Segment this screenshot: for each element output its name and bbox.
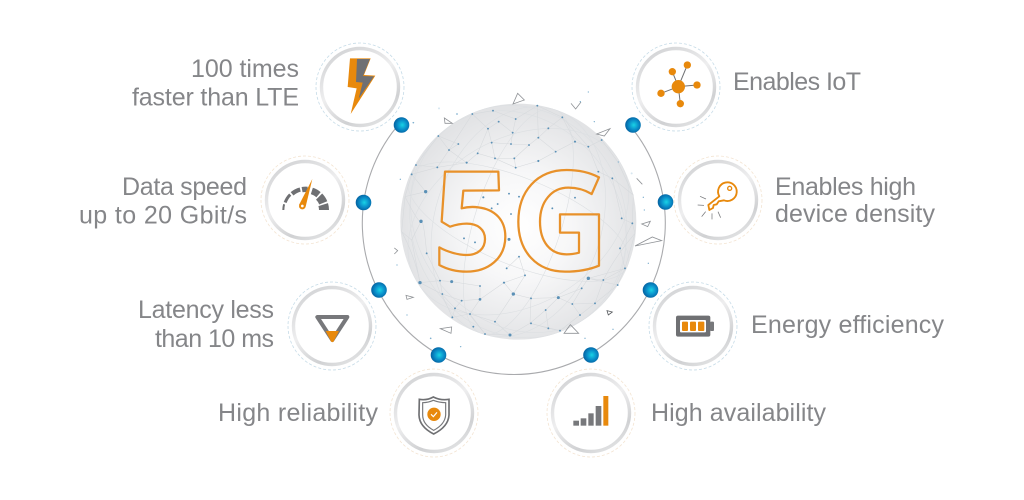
panel: high reliability — [218, 369, 478, 457]
panel: high availability — [547, 369, 826, 457]
panel: latency — [138, 282, 376, 370]
label: Latency less — [138, 296, 274, 324]
label: up to 20 Gbit/s — [79, 202, 247, 230]
label: Energy efficiency — [751, 311, 944, 339]
connector dots — [356, 117, 673, 363]
icon: lightning bolt — [348, 58, 375, 114]
heading: 5G — [439, 170, 599, 272]
globe — [400, 104, 636, 340]
icon: signal bars — [573, 396, 608, 426]
label: Enables IoT — [733, 68, 861, 96]
panel: energy efficiency — [649, 282, 944, 370]
network mesh — [402, 106, 635, 335]
globe meridians — [408, 108, 629, 338]
label — [775, 173, 936, 228]
digit 5 — [439, 172, 505, 272]
label — [132, 55, 299, 112]
letter G — [518, 170, 599, 272]
network nodes — [411, 105, 633, 336]
icon: battery — [676, 316, 714, 337]
panel: 100 times faster than LTE — [132, 43, 404, 131]
scattered triangles and particles — [394, 91, 662, 347]
icon: latency funnel — [317, 317, 347, 342]
icon: IoT network — [657, 61, 701, 107]
label: Data speed — [122, 173, 247, 201]
icon: key with rays — [698, 182, 737, 219]
panel: enables high device density — [674, 156, 936, 244]
panel: data speed — [79, 156, 349, 244]
panel: enables IoT — [632, 43, 861, 131]
label — [138, 296, 274, 353]
label: than 10 ms — [155, 325, 274, 353]
icon: shield — [419, 397, 449, 434]
label: device density — [775, 200, 936, 228]
icon: speedometer — [283, 179, 324, 210]
label — [79, 173, 247, 230]
label: Enables high — [775, 173, 916, 201]
label: faster than LTE — [132, 84, 299, 112]
label: 100 times — [191, 55, 299, 83]
label: High reliability — [218, 399, 378, 427]
label: High availability — [651, 399, 826, 427]
orbit ring — [362, 123, 665, 375]
